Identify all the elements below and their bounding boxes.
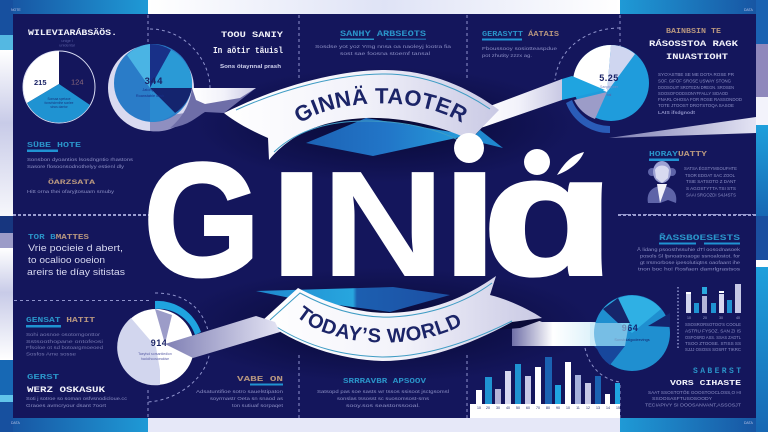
circle on banner — [454, 133, 484, 163]
pie chart 1: 124 — [71, 78, 84, 86]
text block: srrravbr apsoov: SRRRAVBR APSOOV — [343, 378, 427, 386]
text block: vabe on: ton sutiuaf sorpaqet — [232, 403, 284, 408]
ribbon swoosh: upper left — [170, 88, 256, 128]
text block: rasosstoa ragk: SOF. GIFOF SROSE USWAY STONG — [658, 78, 731, 84]
text block: sanhy arbseots: sost sae foosna stoemf tansal — [340, 51, 430, 56]
big title: ginia: ɑ — [483, 120, 614, 310]
text block: srrravbr apsoov — [317, 378, 449, 408]
text block: gerst — [26, 374, 128, 408]
pie chart 4 — [594, 295, 670, 371]
text block: rasosstoa ragk: TOTE JTOOST DROTSTOQA SASOE — [658, 103, 734, 108]
bar chart: small right — [678, 284, 741, 350]
ribbon overlay on pie 4 — [590, 323, 629, 346]
text block: saberst: TECIAPIVY SI DOOSANVANT,ASSOSJT — [645, 402, 741, 408]
pie chart 3 with ring: 5.25 — [599, 73, 619, 83]
text block: rasosstoa ragk: DOOSOUIT SROTEDN DREGN. SROSEN — [658, 85, 734, 90]
text block: horay uatty: SAAI SRGOZDI S4J4STS — [686, 192, 736, 198]
text block: tor bmattes: TOR B MATTES — [28, 234, 89, 242]
text block: toou sany — [213, 30, 284, 70]
text block: chart notes — [685, 322, 742, 352]
bar chart: bottom: 11 — [576, 406, 580, 410]
text block: rassboesests — [637, 233, 741, 272]
pie chart 3 with ring: Sanptuyber — [600, 85, 619, 89]
text block: sube hote: Sasore flosoonsodnothelyy estienl dly — [27, 164, 125, 169]
bottom banner — [264, 276, 542, 361]
pie chart 1: 215 — [34, 78, 47, 87]
bar chart: bottom: 50 — [516, 406, 520, 410]
dotted top and bottom rules — [13, 214, 756, 216]
bar chart: bottom: 20 — [486, 406, 490, 410]
pie chart 5: 914 — [151, 338, 167, 348]
text block: sanhy arbseots: SANHY ARBSEOTS — [340, 30, 426, 39]
text block: gerasy atais: GERASYTT ÁATAIS — [482, 30, 560, 39]
big title: ginia: I — [440, 140, 500, 309]
text block: chart notes: SJJJ OSOSS SOSRT TIKRC — [685, 347, 742, 352]
pie chart 5: hadolhoosoeakise — [141, 357, 169, 361]
text block: rassboesests: tnon boc ho! Rosfaen damrlgrastsos — [638, 266, 741, 272]
text block: gerasy atais — [482, 30, 560, 58]
pie chart 5 — [117, 301, 201, 385]
text block: saberst: SABERST — [693, 367, 741, 376]
text block: gerasy atais: Fboussooy sosiotteaspdue — [482, 46, 558, 51]
pie chart 4: 964 — [622, 323, 638, 333]
ribbon: lower left — [165, 316, 280, 358]
bar chart: bottom — [470, 357, 620, 418]
bar chart: bottom: 30 — [496, 406, 500, 410]
bar chart: bottom: 80 — [546, 406, 550, 410]
corner labels: DATA — [11, 421, 20, 425]
pie chart 3 with ring: bal — [607, 93, 612, 97]
pie chart 2 with ring: Jatony — [142, 88, 154, 92]
text block: rassboesests: ŘASSBOESESTS — [659, 233, 740, 243]
text block: saberst — [645, 367, 742, 408]
corner labels: DATA — [744, 8, 753, 12]
text block: horay uatty: TSIE SATSOTO Z DANT — [686, 179, 736, 184]
text block: oarzsata: ÖARZSATA — [48, 178, 95, 186]
text block: rasosstoa ragk: LAIS ifsdgnodt — [658, 110, 696, 115]
text block: horay uatty: S AGOSTYTTA TSI STS — [686, 186, 736, 191]
bar chart: bottom: 90 — [556, 406, 560, 410]
big title: ginia: N — [321, 140, 445, 309]
text block: vabe on: soyrmastr Oeta sn snaod as — [210, 396, 284, 401]
text block: horay uatty: SATSA ÉGSTYMSOUFHTE — [684, 165, 737, 171]
text block: srrravbr apsoov: sooy.sos seastorssooal. — [346, 403, 420, 408]
pie chart 1: fonsrhdenthe sonlee — [45, 101, 74, 105]
text block: sube hote — [27, 141, 134, 169]
text block: chart notes: OSFOSRD ASS. SSAS ZADTL — [685, 335, 741, 340]
text block: rasosstoa ragk: SOOSOFOODSONYFFALLY SIDAOD — [658, 91, 729, 96]
text block: sube hote: SÜBE HOTE — [27, 141, 82, 150]
text block: srrravbr apsoov: Satsopd pas soe sasts wr tssos ssisoot jsctgsomsl — [317, 389, 449, 394]
text block: tor bmattes — [27, 234, 126, 277]
bar chart: bottom: 10 — [477, 406, 481, 410]
text block: toou sany: In aötir täuisl — [213, 46, 284, 56]
bar chart: bottom: 40 — [506, 406, 510, 410]
text block: gerst: Graoes avmcryour dsant 7oort — [26, 403, 107, 408]
pie chart 3 with ring — [566, 45, 649, 133]
bar chart: small right: 20 — [703, 316, 707, 320]
text block: gerst: WERZ OSKASUK — [27, 386, 105, 395]
bar chart: small right: 10 — [687, 316, 691, 320]
blue diamond behind top banner — [306, 118, 503, 156]
text block: chart notes: SSOSRORSOTOO'S COOLE — [685, 322, 741, 327]
heading: top left: unidental — [59, 44, 75, 48]
text block: toou sany: Sons ötaynnal prash — [220, 64, 282, 70]
text block: chart notes: ASTRU FYSOZ. SAN ZI IS — [685, 328, 741, 334]
text block: oarzsata — [27, 178, 115, 194]
text block: rasosstoa ragk: BAINBSIN TE — [666, 28, 721, 36]
text block: horay uatty: TSOR EDOAT SAC ZOOL — [685, 173, 735, 178]
text block: gerst: GERST — [27, 374, 59, 382]
text block: rasosstoa ragk: FNARL OHOSA FOR ROSE RASSONDOD — [658, 97, 743, 102]
heading: top left — [28, 27, 117, 48]
text block: tor bmattes: areirs tie díay sitistas — [27, 267, 126, 277]
text block: rassboesests: Å lidang psoosthssuhie dTl oosodnasoek — [637, 246, 741, 252]
text block: gerst: Soti j sotroe so soman osfvsnodicloue.cc — [26, 396, 128, 401]
text block: rasosstoa ragk — [649, 28, 743, 115]
text block: rassboesests: gt Irsmorbose ipesolutiqtns oaofaant ihe — [640, 260, 741, 265]
text block: vabe on — [196, 376, 284, 408]
text block: vabe on: VABE ON — [237, 376, 283, 384]
big title: ginia — [144, 120, 614, 310]
bar chart: bottom: 10 — [566, 406, 570, 410]
big title: ginia: G — [144, 130, 260, 309]
pie chart 2 with ring — [108, 44, 194, 131]
pie chart 5: Taeylsd sorsantiedion — [138, 352, 172, 356]
pie chart 1 — [23, 51, 95, 123]
pie chart 4: Sonsbdalgodeevings — [614, 338, 650, 342]
pie chart 1: Sonsaa spetaue — [47, 97, 71, 101]
lower right ribbon — [470, 310, 629, 346]
text block: srrravbr apsoov: sonslas tssosst sc suosomsost-sms — [337, 396, 430, 401]
text block: sube hote: Sonsbon dyoantios lsosdngntio rhastons — [27, 157, 134, 162]
bottom banner: TODAY’S WORLD — [300, 305, 460, 342]
text block: sanhy arbseots — [315, 30, 452, 56]
bar chart: bottom: 70 — [536, 406, 540, 410]
text block: saberst: SSOOSASFTUSOSOODY — [652, 396, 712, 401]
blue diamond behind bottom banner — [256, 287, 450, 312]
text block: chart notes: TSOO ZTOOSE. STISS SS — [685, 341, 741, 346]
heading: top left: WILEVIARÁBSÄÖS. — [28, 27, 117, 38]
text block: rasosstoa ragk: SYO'ASTBE SE ME DOTA ROSE PR — [658, 72, 735, 77]
corner labels: NOTE — [11, 8, 21, 12]
heading: top left: unige l — [61, 39, 73, 43]
corner labels: DATA — [744, 421, 753, 425]
big title: ginia: I — [267, 140, 327, 309]
text block: gerasy atais: pot zhutity zzzx ag. — [482, 53, 532, 58]
text block: tor bmattes: Vrie pocieie d abert, — [28, 243, 123, 253]
text block: horay uatty — [649, 151, 737, 198]
text block: gensat hatit: GENSAT HATIT — [26, 317, 95, 325]
pie chart 1: sinos daetor — [50, 105, 69, 109]
bar chart: bottom: 14 — [606, 406, 610, 410]
bar chart: bottom: 13 — [596, 406, 600, 410]
text block: gensat hatit: Sohi aosnoe osotomgonttor — [26, 332, 101, 337]
ribbon wedge: right — [609, 117, 756, 138]
text block: rasosstoa ragk: INUASTIOHT — [666, 52, 728, 62]
text block: sanhy arbseots: Sosdse yot yoz Ymg nnsa oa naoleyj lootra fia — [315, 44, 452, 49]
bar chart: small right: 30 — [719, 316, 723, 320]
text block: toou sany: TOOU SANIY — [221, 30, 284, 40]
text block: saberst: VORS CIHASTE — [670, 380, 742, 388]
text block: gensat hatit — [26, 317, 104, 356]
bar chart: bottom: 60 — [526, 406, 530, 410]
text block: oarzsata: Hitt orna thei ofaryjtosuam smuby — [27, 189, 115, 194]
text block: rassboesests: posols Sl ljsnoatnoaoge ssnoalostot. for — [640, 254, 741, 258]
bar chart: bottom: 12 — [586, 406, 590, 410]
pie chart 2 with ring: Roanstable ossh — [136, 94, 164, 98]
bar chart: small right: 40 — [736, 316, 740, 320]
text block: rasosstoa ragk: RÁSOSSTOA RAGK — [649, 38, 739, 49]
icon: person portrait — [648, 161, 676, 203]
top banner — [224, 70, 499, 160]
text block: horay uatty: HORAY UATTY — [649, 151, 708, 159]
text block: gensat hatit: Ffsoloe ot sd botoargmoeoed — [26, 345, 104, 350]
pie chart 2 with ring: 344 — [145, 76, 163, 87]
text block: gensat hatit: Sosfos Ame sosse — [26, 352, 77, 356]
text block: vabe on: Adsatuntifioe sotro sauelstipaton — [196, 389, 284, 394]
bar chart: bottom: 15 — [616, 406, 620, 410]
text block: saberst: SAAT SSOSTOTÖE GOOSTOOCLOSS,O HI — [648, 389, 741, 395]
text block: gensat hatit: Sstsoothopane ontofeosi — [26, 339, 103, 344]
ribbon: upper right — [475, 76, 605, 130]
text block: tor bmattes: to ocalioo ooeion — [28, 255, 105, 265]
